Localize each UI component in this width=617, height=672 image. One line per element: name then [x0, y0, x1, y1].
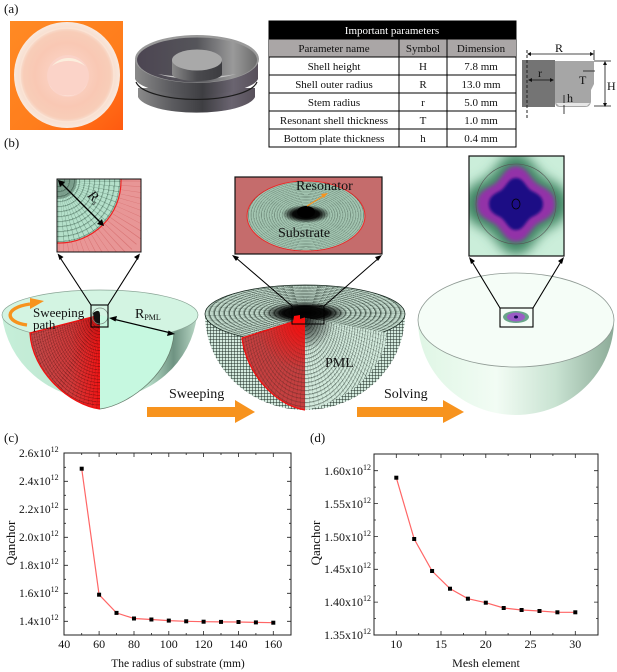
y-axis tick labels: 12 — [51, 473, 59, 482]
table text: Shell outer radius — [295, 79, 373, 91]
cross-section dimension diagram — [522, 41, 616, 119]
table header row — [269, 39, 516, 57]
y-axis tick labels: 12 — [363, 496, 371, 505]
table text: Important parameters — [345, 25, 439, 37]
RPML label: PML — [144, 313, 161, 322]
label Substrate: Substrate — [278, 226, 330, 241]
panel label (b): (b) — [4, 135, 19, 150]
parameters table — [269, 21, 516, 147]
orange arrow: sweeping — [147, 400, 255, 423]
x-axis tick labels: 15 — [435, 637, 447, 651]
mint cut face — [100, 315, 174, 409]
table text: Parameter name — [298, 43, 370, 55]
x-axis tick labels: 160 — [264, 637, 282, 651]
CAD model of resonator — [135, 35, 259, 113]
y-axis tick labels: 2.4x10 — [19, 476, 51, 488]
y-axis tick labels: 1.6x10 — [19, 588, 51, 600]
chart (d): Qanchor vs mesh element — [308, 454, 598, 670]
y-axis tick labels: 1.4x10 — [19, 616, 51, 628]
y-axis tick labels: 1.35x10 — [324, 628, 363, 642]
y-axis tick labels: 12 — [51, 501, 59, 510]
y-axis tick labels — [324, 463, 371, 642]
y-axis tick labels: 1.55x10 — [324, 497, 363, 511]
table text: 1.0 mm — [464, 115, 498, 127]
cross-section dimension diagram: R — [555, 41, 563, 55]
x-axis tick labels — [58, 637, 282, 651]
panel label (d): (d) — [310, 430, 325, 445]
small field spot — [503, 311, 529, 323]
sweeping path curved arrow — [10, 298, 44, 325]
table text: Bottom plate thickness — [284, 133, 384, 145]
x-axis tick labels: 25 — [524, 637, 536, 651]
x-axis tick labels: 10 — [390, 637, 402, 651]
cross-section dimension diagram: h — [567, 91, 573, 105]
table text: r — [421, 97, 425, 109]
panel label (a): (a) — [4, 1, 18, 16]
x-axis tick labels — [390, 637, 581, 651]
y-axis tick labels: 12 — [363, 529, 371, 538]
y-axis tick labels: 12 — [51, 585, 59, 594]
x-axis tick labels: 120 — [195, 637, 213, 651]
data line — [82, 469, 273, 623]
red meshed cut face — [29, 314, 100, 410]
inset: resonator and substrate zoom — [235, 177, 382, 254]
y-axis tick labels: 12 — [51, 529, 59, 538]
x-axis tick labels: 40 — [58, 637, 70, 651]
label Rs: s — [90, 199, 99, 207]
panel label (c): (c) — [4, 430, 18, 445]
x-axis tick labels: 100 — [160, 637, 178, 651]
table text: H — [419, 61, 427, 73]
y-axis tick labels: 1.8x10 — [19, 560, 51, 572]
data points — [80, 467, 275, 625]
sweeping label: Sweeping — [169, 387, 224, 402]
x-axis tick labels: 140 — [230, 637, 248, 651]
table text — [280, 25, 506, 145]
radius arrow Rs — [58, 180, 104, 226]
y-axis tick labels: 12 — [51, 557, 59, 566]
x-axis tick labels: 80 — [128, 637, 140, 651]
table text: Shell height — [308, 61, 360, 73]
solving label: Solving — [384, 387, 428, 402]
cross-section dimension diagram: T — [579, 73, 587, 87]
zoom box and arrows, right — [469, 257, 564, 327]
y-axis tick labels: 12 — [51, 445, 59, 454]
y-axis tick labels — [19, 445, 59, 628]
photo of fabricated resonator — [10, 21, 123, 130]
sweeping path label: path — [33, 317, 56, 332]
table text: Symbol — [406, 43, 440, 55]
resonator at center — [93, 311, 100, 325]
orange pointer arrow — [307, 193, 328, 206]
meshed right cut face — [305, 318, 387, 410]
y-axis title: Qanchor — [308, 520, 323, 565]
table text: Resonant shell thickness — [280, 115, 388, 127]
y-axis tick labels: 1.60x10 — [324, 464, 363, 478]
cross-section dimension diagram: r — [538, 66, 542, 80]
y-axis tick labels: 12 — [363, 594, 371, 603]
cross-section dimension diagram: H — [607, 79, 616, 93]
right hemisphere: solved model — [418, 273, 614, 415]
orange arrow: solving — [357, 400, 464, 423]
y-axis tick labels: 12 — [363, 463, 371, 472]
x-axis tick labels: 20 — [480, 637, 492, 651]
RPML label: R — [135, 307, 144, 322]
table text: h — [420, 133, 426, 145]
data points — [394, 476, 577, 614]
left hemisphere: geometry with swept face — [2, 290, 198, 410]
zoom box and arrows, left — [58, 254, 140, 327]
y-axis tick labels: 12 — [363, 627, 371, 636]
chart (c): Qanchor vs radius of substrate — [3, 445, 291, 670]
inset: solved mode shape field — [463, 153, 569, 256]
label Rs: R — [84, 188, 101, 205]
data line — [396, 478, 575, 612]
label Resonator: Resonator — [296, 179, 353, 194]
table text: 5.0 mm — [464, 97, 498, 109]
table title bar — [269, 21, 516, 39]
x-axis title: The radius of substrate (mm) — [111, 658, 245, 670]
table text: R — [419, 79, 427, 91]
table text: Stem radius — [308, 97, 360, 109]
y-axis tick labels: 1.45x10 — [324, 562, 363, 576]
red meshed left cut face — [241, 317, 306, 411]
x-axis tick labels: 60 — [93, 637, 105, 651]
y-axis tick labels: 1.50x10 — [324, 530, 363, 544]
table text: 7.8 mm — [464, 61, 498, 73]
middle hemisphere: swept mesh — [204, 284, 406, 411]
y-axis tick labels: 1.40x10 — [324, 595, 363, 609]
inset: substrate radius zoom — [56, 178, 142, 252]
y-axis tick labels: 12 — [363, 561, 371, 570]
y-axis title: Qanchor — [3, 520, 18, 565]
x-axis title: Mesh element — [452, 656, 520, 670]
table text: 13.0 mm — [461, 79, 501, 91]
y-axis tick labels: 12 — [51, 613, 59, 622]
PML label: PML — [325, 356, 354, 371]
table text: Dimension — [457, 43, 506, 55]
table text: T — [420, 115, 427, 127]
table text: 0.4 mm — [464, 133, 498, 145]
y-axis tick labels: 2.0x10 — [19, 532, 51, 544]
RPML arrow — [109, 316, 175, 336]
y-axis tick labels: 2.6x10 — [19, 448, 51, 460]
sweeping path label: Sweeping — [33, 305, 85, 320]
x-axis tick labels: 30 — [569, 637, 581, 651]
y-axis tick labels: 2.2x10 — [19, 504, 51, 516]
zoom box and arrows, middle — [232, 255, 382, 324]
